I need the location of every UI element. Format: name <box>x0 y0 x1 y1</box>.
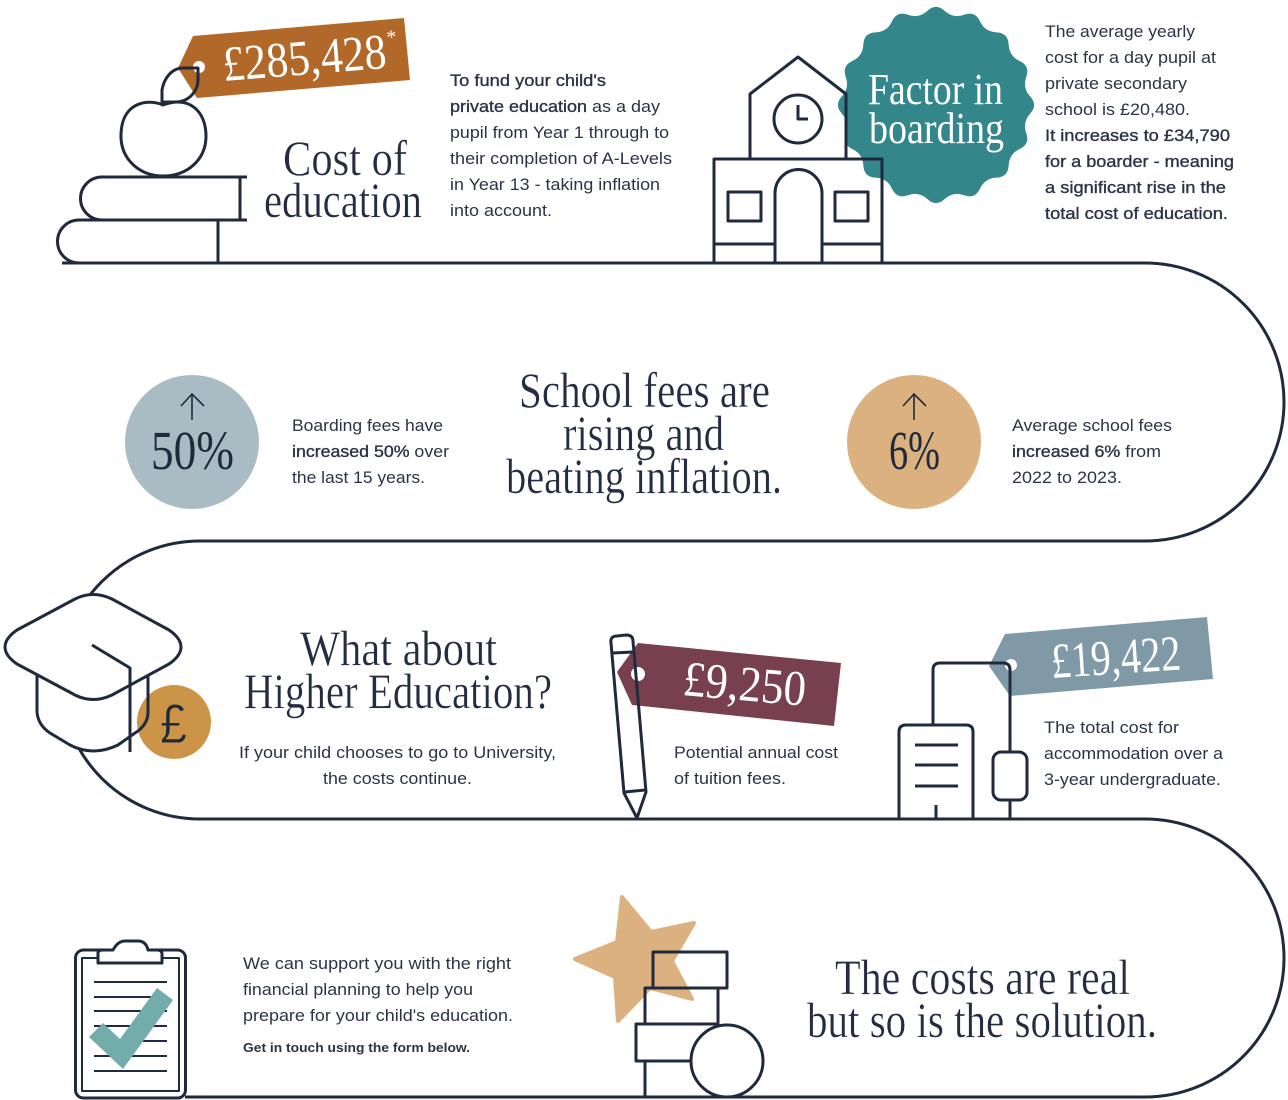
icon: apple on books <box>58 68 247 263</box>
heading: The costs are real: but so is the solution. <box>807 992 1157 1048</box>
heading: Cost of education <box>264 130 422 228</box>
text: financial planning support: financial planning to help you <box>243 981 473 999</box>
text: private education cost: into account. <box>450 202 552 220</box>
stat circle: 50%: 50% <box>151 420 234 481</box>
text: private education cost: their completion of A-Levels <box>450 150 672 168</box>
price tag: £9,250 <box>617 643 841 726</box>
icon: school building <box>714 57 882 263</box>
heading: What about Higher Education: Higher Education? <box>244 663 552 719</box>
price tag: £19,422: £19,422 <box>1049 624 1182 689</box>
badge: Factor in boarding: boarding <box>869 104 1004 153</box>
text: financial planning support: We can support you with the right <box>243 955 511 973</box>
heading: School fees are rising: rising and <box>563 405 724 461</box>
text: private education cost <box>450 72 672 220</box>
text: boarding cost: cost for a day pupil at <box>1045 49 1216 67</box>
icon: luggage <box>899 663 1027 819</box>
heading: School fees are rising: School fees are <box>519 362 770 418</box>
text: boarding cost: a significant rise in the <box>1045 179 1226 197</box>
text: private education cost: in Year 13 - taking inflation <box>450 176 660 194</box>
price tag: £285,428: £285,428 <box>220 23 388 92</box>
text: boarding cost: total cost of education. <box>1045 205 1228 223</box>
text: boarding cost <box>1045 23 1234 223</box>
text: financial planning support: prepare for your child's education. <box>243 1007 513 1025</box>
stat circle: 50% <box>125 375 259 509</box>
text: average fees increase: 2022 to 2023. <box>1012 469 1122 487</box>
heading: The costs are real <box>807 949 1157 1048</box>
heading: School fees are rising: beating inflation. <box>506 448 782 504</box>
text: boarding cost: private secondary <box>1045 75 1188 93</box>
price tag: £9,250: £9,250 <box>681 650 808 717</box>
text: boarding fees increase: Boarding fees have <box>292 417 443 435</box>
text: private education cost: To fund your child's <box>450 72 606 90</box>
text: financial planning support <box>243 955 513 1055</box>
icon: clipboard with check <box>76 941 186 1098</box>
heading: The costs are real: The costs are real <box>835 949 1130 1005</box>
text: boarding cost: It increases to £34,790 <box>1045 127 1230 145</box>
icon: graduation cap with pound coin <box>5 594 211 759</box>
text: average fees increase: Average school fees <box>1012 417 1172 435</box>
price tag: £19,422 <box>989 617 1213 696</box>
text: average fees increase <box>1012 417 1172 487</box>
text: tuition fees <box>674 744 838 788</box>
text: accommodation: 3-year undergraduate. <box>1044 771 1221 789</box>
badge: Factor in boarding <box>838 7 1034 203</box>
text: boarding cost: The average yearly <box>1045 23 1196 41</box>
text: tuition fees: of tuition fees. <box>674 770 786 788</box>
badge: Factor in boarding: Factor in <box>868 65 1003 114</box>
text: boarding cost: school is £20,480. <box>1045 101 1190 119</box>
text: university costs <box>239 744 556 788</box>
stat circle: 6%: 6% <box>889 420 940 481</box>
text: average fees increase: increased 6% from <box>1012 443 1161 461</box>
text: university costs: If your child chooses to go to University, <box>239 744 556 762</box>
heading: What about Higher Education <box>244 620 552 719</box>
heading: School fees are rising <box>506 362 782 504</box>
text: tuition fees: Potential annual cost <box>674 744 838 762</box>
stat circle: 6% <box>847 375 981 509</box>
icon: graduation cap with pound coin: £ <box>160 692 187 755</box>
text: boarding cost: for a boarder - meaning <box>1045 153 1234 171</box>
heading: Cost of education: education <box>264 172 422 228</box>
winding path line <box>61 263 1284 1097</box>
text: accommodation <box>1044 719 1224 789</box>
heading: What about Higher Education: What about <box>300 620 497 676</box>
text: university costs: the costs continue. <box>323 770 472 788</box>
text: boarding fees increase: the last 15 years. <box>292 469 425 487</box>
icon: pencil <box>611 635 646 818</box>
text: accommodation: The total cost for <box>1044 719 1180 737</box>
text: private education cost: pupil from Year 1 through to <box>450 124 669 142</box>
text: financial planning support: Get in touch using the form below. <box>243 1040 470 1055</box>
text: accommodation: accommodation over a <box>1044 745 1224 763</box>
text: private education cost: private education as a day <box>450 98 661 116</box>
icon: star and stacked blocks <box>575 897 763 1097</box>
text: boarding fees increase: increased 50% over <box>292 443 450 461</box>
heading: Cost of education: Cost of <box>283 130 407 186</box>
text: boarding fees increase <box>292 417 450 487</box>
price tag: £285,428: * <box>386 26 397 49</box>
